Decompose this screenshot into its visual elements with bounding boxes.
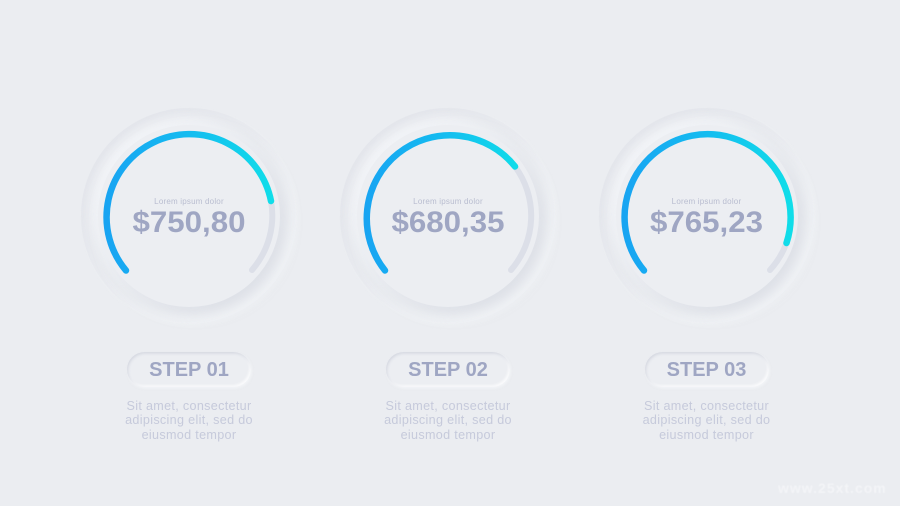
watermark: www.25xt.com <box>778 480 887 496</box>
gauge 03: arc and value: $765,23 <box>650 206 763 239</box>
step 01 description <box>125 398 253 442</box>
gauge 02: arc and value: $680,35 <box>392 206 504 239</box>
step 01 label <box>127 352 251 387</box>
step 02 description <box>384 398 512 442</box>
step 03 description: Sit amet, consectetur <box>644 398 769 412</box>
step 03 description: eiusmod tempor <box>659 428 754 442</box>
step 01 description: eiusmod tempor <box>142 428 236 442</box>
step 03 label: STEP 03 <box>667 359 746 381</box>
step 01 description: adipiscing elit, sed do <box>125 413 253 427</box>
step 01 description: Sit amet, consectetur <box>126 398 252 412</box>
step 02 label: STEP 02 <box>408 359 488 381</box>
gauge 01: arc and value: $750,80 <box>132 206 246 239</box>
step 03 label <box>644 352 768 387</box>
gauge 03: arc and value: Lorem ipsum dolor <box>672 197 741 206</box>
step 02 description: eiusmod tempor <box>401 428 495 442</box>
gauge 01: arc and value: Lorem ipsum dolor <box>154 197 224 206</box>
step 03 description <box>643 398 770 442</box>
step 02 label <box>386 352 510 387</box>
step 02 description: adipiscing elit, sed do <box>384 413 512 427</box>
step 02 description: Sit amet, consectetur <box>385 398 510 412</box>
step 03 description: adipiscing elit, sed do <box>643 413 770 427</box>
step 01 label: STEP 01 <box>149 359 229 381</box>
gauge 02: arc and value: Lorem ipsum dolor <box>413 197 483 206</box>
